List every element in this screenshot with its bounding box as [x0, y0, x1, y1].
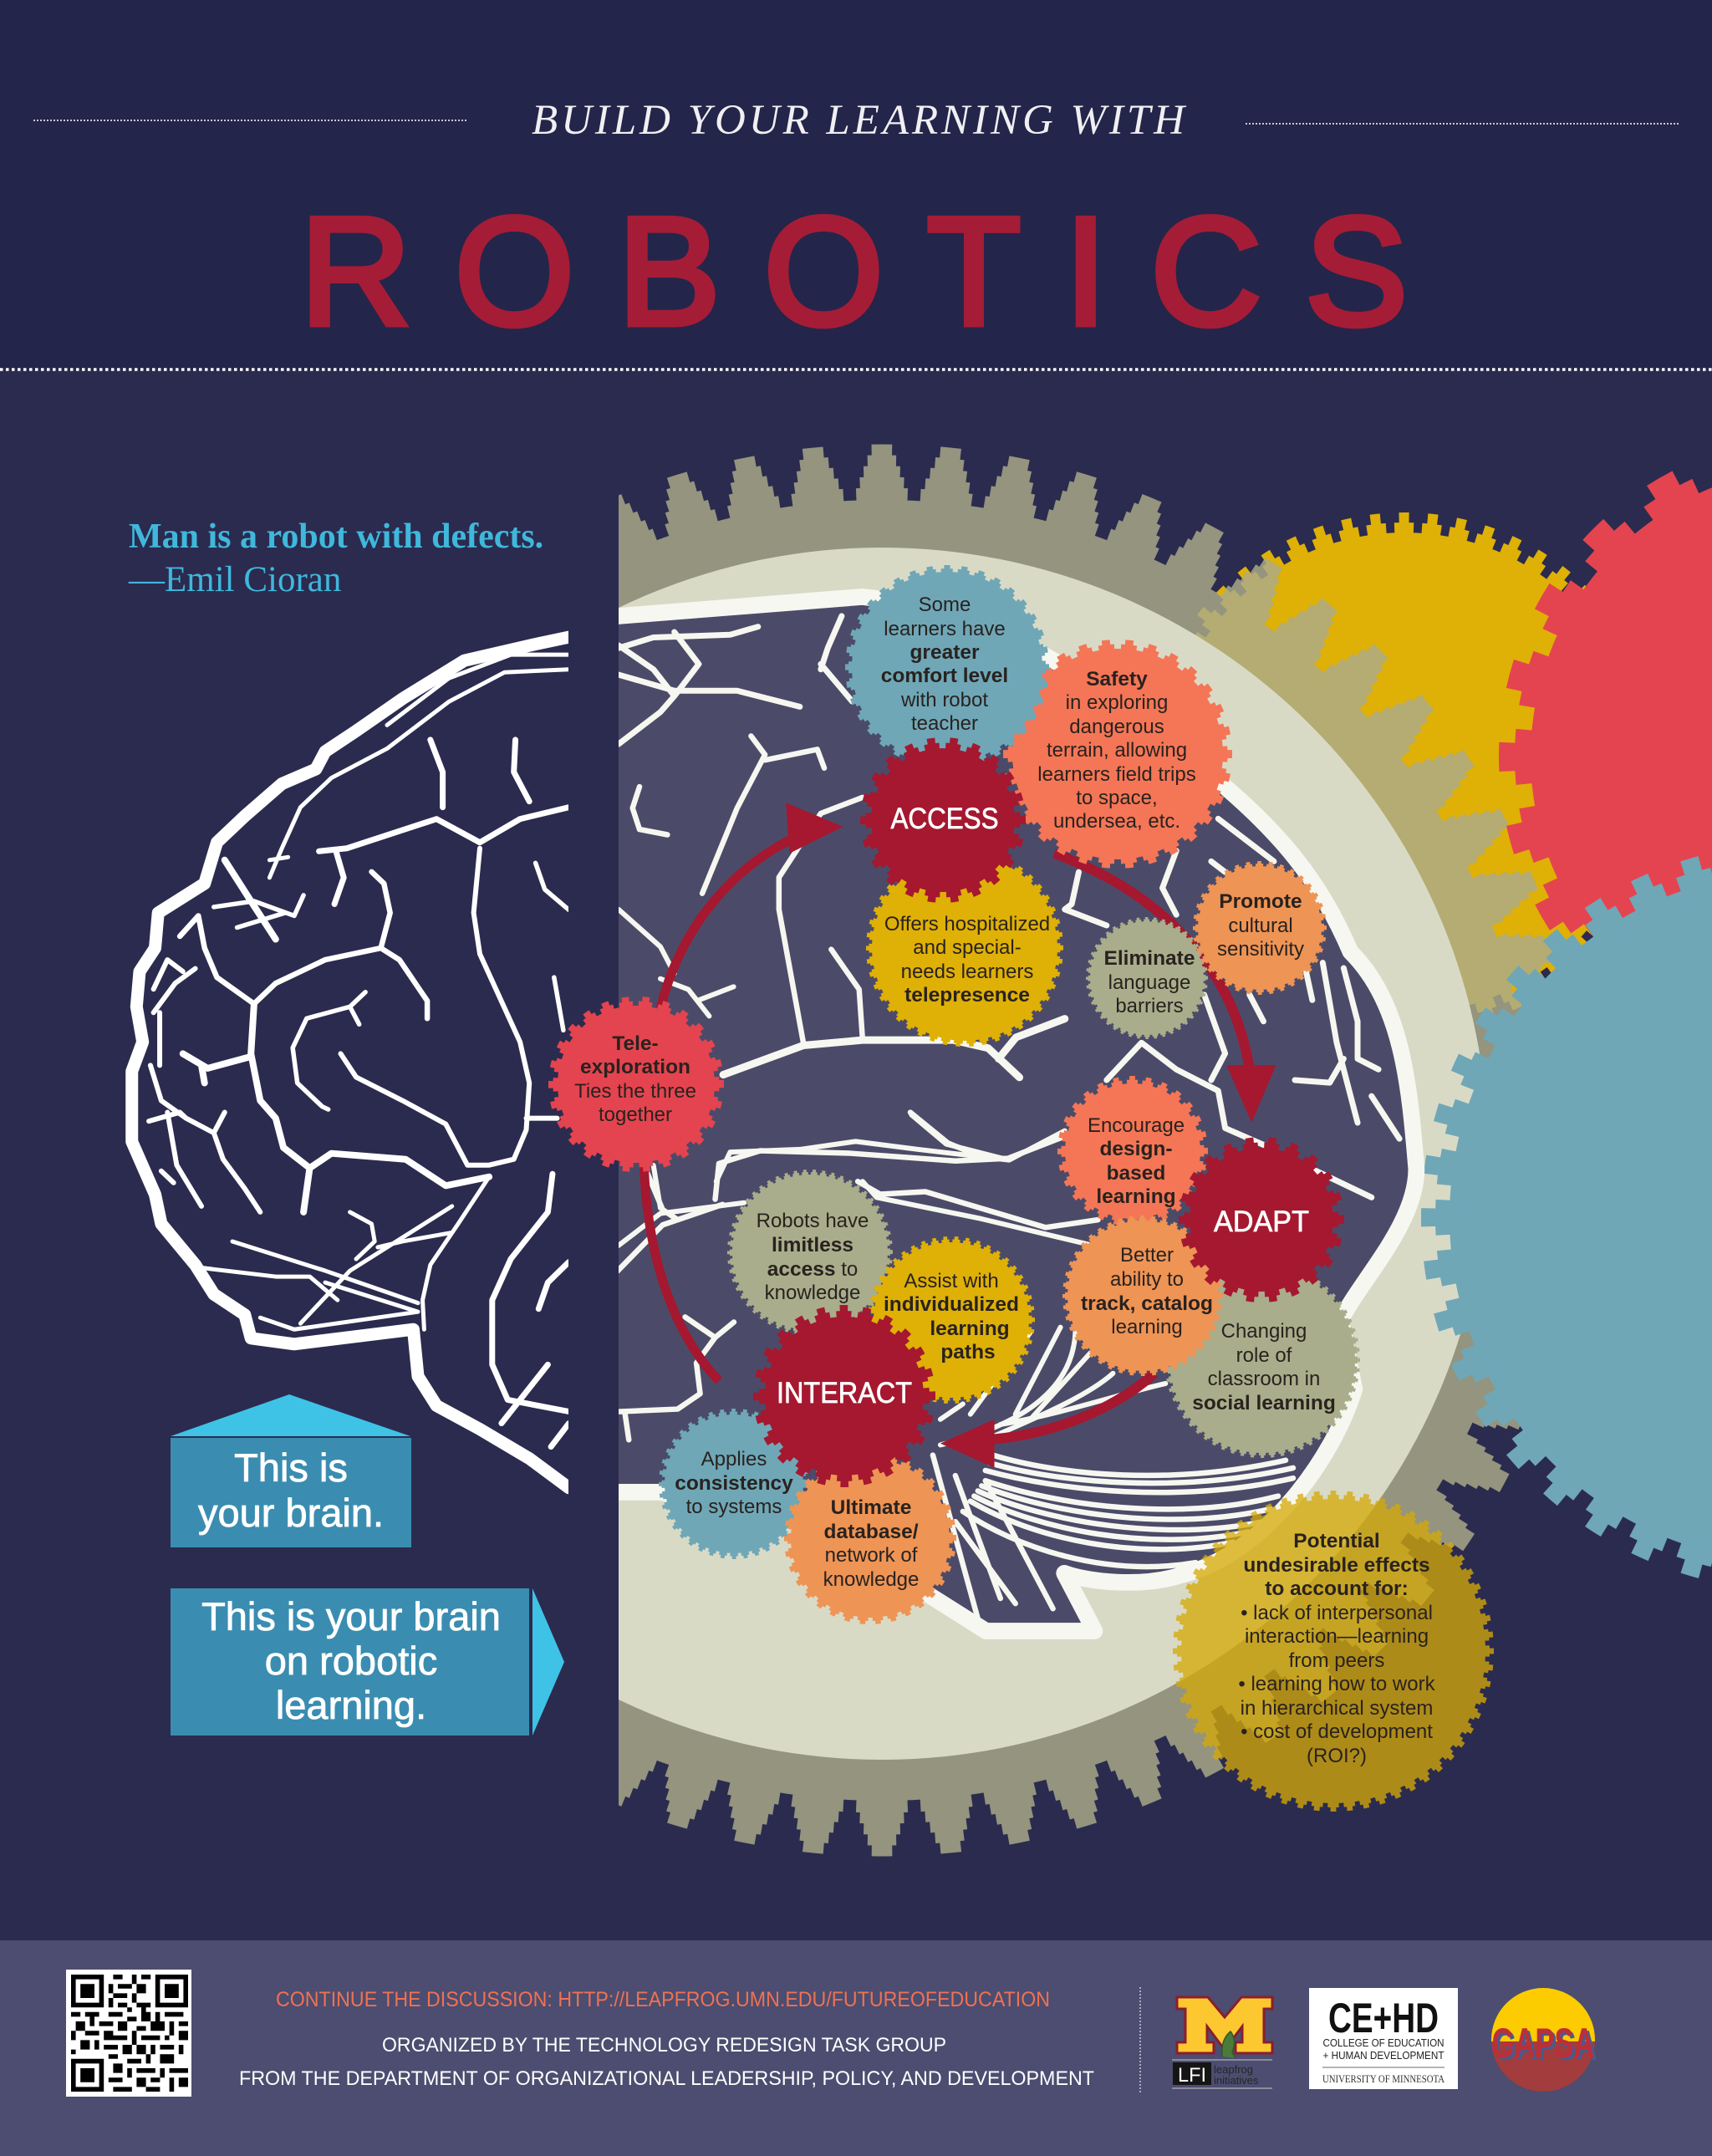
gear: consistency: Applies — [701, 1448, 767, 1470]
gear: potential undesirable effects: Potential — [1293, 1530, 1380, 1552]
cerebellum lines — [933, 1328, 1293, 1618]
arrow: access to adapt — [1054, 854, 1276, 1123]
gear: interact — [759, 1311, 930, 1481]
gear: limitless access: limitless — [772, 1234, 853, 1256]
gear: telepresence: and special- — [913, 936, 1022, 959]
logo: leapfrog initiatives: initiatives — [1214, 2074, 1259, 2087]
gear: consistency: consistency — [675, 1472, 793, 1495]
gear: ultimate database: database/ — [823, 1521, 919, 1543]
gear: potential undesirable effects: (ROI?) — [1307, 1745, 1367, 1767]
logo: university of minnesota M — [1177, 1997, 1272, 2058]
gear: tele-exploration: together — [599, 1103, 672, 1126]
gear: tele-exploration: Ties the three — [574, 1080, 696, 1103]
logo: GAPSA — [1488, 1988, 1597, 2093]
gear: comfort level: Some — [919, 594, 971, 616]
gear: ultimate database — [787, 1455, 953, 1621]
gear: eliminate language barriers: Eliminate — [1104, 947, 1195, 970]
gear: comfort level — [848, 568, 1046, 766]
gear: telepresence: telepresence — [904, 984, 1030, 1007]
gear: ultimate database: network of — [825, 1544, 918, 1567]
footer: continue the discussion: CONTINUE THE DISCUSSION: HTTP://LEAPFROG.UMN.EDU/FUTUREOFEDUCATION — [276, 1988, 1050, 2011]
gear: social learning: role of — [1236, 1344, 1292, 1367]
gear: individualized learning: individualized — [884, 1293, 1019, 1316]
gear: social learning — [1167, 1265, 1358, 1455]
gear: individualized learning — [871, 1239, 1032, 1401]
gear: safety: in exploring — [1066, 691, 1168, 714]
gear: consistency — [662, 1411, 806, 1557]
gear: track, catalog: track, catalog — [1081, 1292, 1213, 1315]
callout: this is your brain: This is — [234, 1445, 348, 1490]
gear: individualized learning: learning — [930, 1318, 1010, 1340]
logo: CEHD — [1309, 1988, 1458, 2089]
gear: safety: dangerous — [1069, 716, 1164, 738]
footer: organizers: FROM THE DEPARTMENT OF ORGANIZATIONAL LEADERSHIP, POLICY, AND DEVELOPMENT — [239, 2067, 1094, 2090]
callout: this is your brain: your brain. — [198, 1491, 384, 1535]
gear: limitless access — [730, 1172, 890, 1333]
logo: GAPSA: GAPSA — [1491, 2020, 1595, 2067]
gear: individualized learning: Assist with — [904, 1270, 999, 1292]
quote: Man is a robot with defects. — [129, 517, 543, 556]
gear: interact: INTERACT — [777, 1377, 912, 1409]
logo: CEHD: COLLEGE OF EDUCATION — [1322, 2037, 1444, 2049]
gear: red — [1515, 451, 1712, 1063]
gear: promote cultural sensitivity: Promote — [1219, 890, 1302, 913]
callout: this is your brain on robotic learning: learning. — [276, 1683, 426, 1727]
gear: comfort level: greater — [910, 641, 980, 664]
gear: design-based learning: learning — [1096, 1185, 1176, 1208]
gear: safety: undersea, etc. — [1053, 810, 1180, 833]
gear: safety: Safety — [1086, 668, 1148, 691]
gear: comfort level: teacher — [911, 712, 978, 735]
logo: GAPSA: GAPSA — [1495, 2022, 1597, 2069]
gear: ultimate database: Ultimate — [831, 1496, 911, 1519]
arrows — [644, 803, 1276, 1468]
footer: organizers — [239, 2034, 1094, 2090]
gear: telepresence: needs learners — [901, 961, 1033, 983]
gear: track, catalog: ability to — [1110, 1268, 1184, 1291]
logo: leapfrog initiatives — [1172, 2059, 1272, 2089]
illustration: white line brain on dark — [132, 637, 569, 1488]
logo: leapfrog initiatives: leapfrog — [1214, 2063, 1253, 2076]
gear: eliminate language barriers: barriers — [1115, 995, 1184, 1017]
gear: track, catalog: Better — [1120, 1244, 1174, 1267]
gear: access: ACCESS — [891, 803, 998, 835]
gear: telepresence — [869, 853, 1060, 1043]
gear: potential undesirable effects: interaction—learning — [1245, 1625, 1429, 1648]
gear: safety: learners field trips — [1037, 763, 1196, 786]
gear: limitless access: Robots have — [757, 1210, 869, 1232]
qr code — [66, 1970, 191, 2097]
gear: potential undesirable effects: • cost of development — [1241, 1720, 1433, 1743]
gear: social learning: classroom in — [1208, 1368, 1320, 1390]
gear: access — [866, 742, 1020, 898]
gear: adapt — [1184, 1142, 1339, 1297]
gear: eliminate language barriers — [1088, 920, 1205, 1037]
gear: promote cultural sensitivity: cultural — [1228, 915, 1293, 937]
gear: potential undesirable effects: from peers — [1289, 1649, 1384, 1672]
gear: limitless access: access to — [767, 1258, 858, 1281]
footer: organizers: ORGANIZED BY THE TECHNOLOGY REDESIGN TASK GROUP — [382, 2034, 946, 2057]
gear: safety: to space, — [1076, 787, 1158, 809]
gear: potential undesirable effects — [1177, 1495, 1490, 1807]
quote — [128, 517, 543, 599]
gear: adapt: ADAPT — [1214, 1205, 1309, 1238]
gear: comfort level: comfort level — [881, 665, 1008, 687]
gear: potential undesirable effects: undesirable effects — [1243, 1554, 1430, 1577]
pale disc — [619, 548, 1480, 1760]
arrow: adapt to interact — [940, 1374, 1154, 1468]
gear: tele-exploration: Tele- — [612, 1032, 659, 1055]
gear: tele-exploration: exploration — [580, 1056, 690, 1078]
gear: safety — [1008, 644, 1227, 864]
arrow: tele-exploration to interact — [644, 1164, 719, 1381]
gear: promote cultural sensitivity: sensitivity — [1217, 938, 1304, 961]
callout: this is your brain on robotic learning — [171, 1588, 564, 1736]
gear: track, catalog — [1065, 1218, 1220, 1374]
gear: blue — [1435, 858, 1712, 1577]
logo: CEHD: CE+HD — [1328, 1995, 1439, 2041]
arrow: tele-exploration to access — [660, 803, 843, 1008]
gear: safety: terrain, allowing — [1047, 739, 1187, 762]
gear: potential undesirable effects: to account for: — [1265, 1577, 1409, 1600]
gear: ultimate database: knowledge — [823, 1568, 919, 1591]
gear: promote cultural sensitivity — [1195, 864, 1324, 992]
header band — [0, 0, 1712, 370]
gear: design-based learning: design- — [1099, 1138, 1173, 1160]
gear: track, catalog: learning — [1111, 1316, 1183, 1338]
quote: —Emil Cioran — [128, 560, 341, 599]
gear: consistency: to systems — [686, 1496, 782, 1518]
gear: potential undesirable effects: • learning how to work — [1238, 1673, 1436, 1695]
footer band — [0, 1940, 1712, 2156]
logo: leapfrog initiatives: LFI — [1178, 2064, 1206, 2087]
gear: telepresence: Offers hospitalized — [884, 913, 1050, 935]
gear: design-based learning: Encourage — [1088, 1114, 1185, 1137]
callout: this is your brain — [171, 1394, 411, 1547]
gear: design-based learning — [1062, 1080, 1204, 1222]
logo: CEHD: UNIVERSITY OF MINNESOTA — [1322, 2072, 1444, 2085]
gear: comfort level: learners have — [884, 618, 1006, 640]
gear: potential undesirable effects: • lack of interpersonal — [1241, 1602, 1433, 1624]
callout: this is your brain on robotic learning: This is your brain — [201, 1594, 501, 1639]
gear: social learning: social learning — [1192, 1392, 1336, 1414]
gear: large grey — [619, 445, 1553, 1856]
illustration: brain inside gear — [578, 597, 1416, 1631]
gear: social learning: Changing — [1221, 1320, 1307, 1343]
gear: comfort level: with robot — [900, 689, 988, 711]
gear: potential undesirable effects: in hierarchical system — [1241, 1697, 1433, 1720]
gear: limitless access: knowledge — [765, 1282, 860, 1304]
callout: this is your brain on robotic learning: on robotic — [265, 1639, 437, 1683]
gear: yellow — [1154, 522, 1655, 1024]
gear: eliminate language barriers: language — [1108, 971, 1190, 994]
gear: individualized learning: paths — [940, 1341, 996, 1363]
gear: design-based learning: based — [1107, 1162, 1165, 1185]
logo: CEHD: + HUMAN DEVELOPMENT — [1322, 2050, 1444, 2062]
heading: build your learning with: BUILD YOUR LEARNING WITH — [532, 97, 1187, 144]
title: robotics: ROBOTICS — [300, 185, 1408, 357]
gear: tele-exploration — [553, 1002, 719, 1167]
